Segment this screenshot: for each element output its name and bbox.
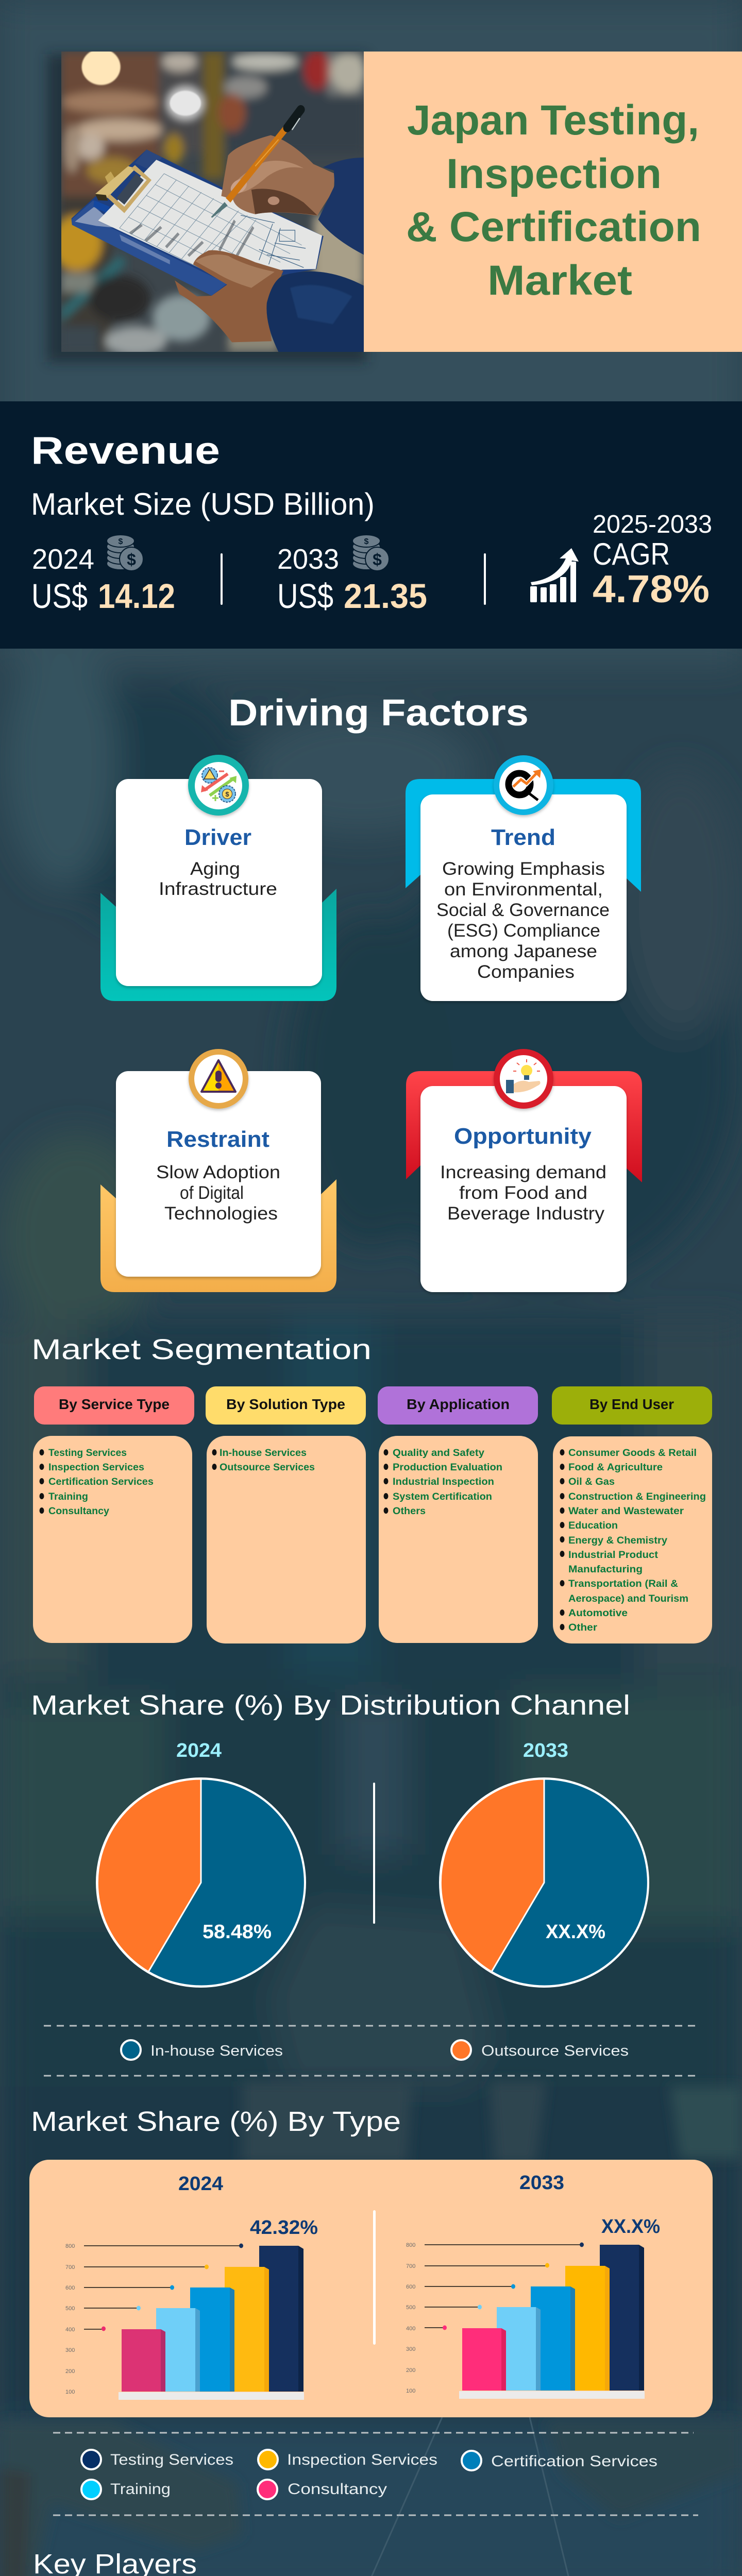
column: by end user: Education xyxy=(568,1520,618,1531)
stat: 2024 revenue: 2024 xyxy=(32,543,94,575)
icon: growth bars and arrow xyxy=(530,548,579,602)
column: by service type: Consultancy xyxy=(48,1506,109,1517)
stat: 2033 revenue: US$ xyxy=(277,577,333,616)
heading: driving factors: Driving Factors xyxy=(228,692,529,734)
text: restraint description: Technologies xyxy=(164,1204,278,1224)
column: by solution type: In-house Services xyxy=(220,1448,307,1459)
bar chart: 2024: 2024 xyxy=(178,2173,223,2195)
column: by service type: Certification Services xyxy=(48,1477,154,1487)
text: driver description: Infrastructure xyxy=(159,879,277,899)
column: by end user: Consumer Goods & Retail xyxy=(568,1448,697,1459)
form paper and table xyxy=(98,160,322,281)
holding hand xyxy=(175,250,283,342)
bar chart: 2033: 100 xyxy=(406,2388,415,2394)
column: by application: Quality and Safety xyxy=(393,1448,484,1459)
column: by end user: Oil & Gas xyxy=(568,1477,615,1487)
legend: type: Certification Services xyxy=(491,2453,657,2470)
text: trend description: on Environmental, xyxy=(444,879,603,900)
title: & Certification xyxy=(406,204,701,250)
bar chart: 2033: 2033 xyxy=(519,2172,564,2194)
title: Inspection xyxy=(446,150,662,197)
bar chart: 2033: 400 xyxy=(406,2326,415,2332)
divider xyxy=(484,553,486,605)
legend: type: Consultancy xyxy=(288,2481,387,2498)
pie chart: 2033: 2033 xyxy=(523,1740,568,1761)
panel: trend card xyxy=(406,755,641,1001)
panel: restraint card xyxy=(100,1049,336,1292)
bar chart: 2024: 200 xyxy=(65,2368,75,2375)
text: trend description: Social & Governance xyxy=(436,900,610,920)
icon: restraint badge xyxy=(189,1049,248,1109)
text: restraint description xyxy=(156,1162,280,1224)
stat: CAGR: CAGR xyxy=(593,537,670,571)
pie chart: 2024: 2024 xyxy=(176,1740,222,1761)
title: Market xyxy=(487,257,632,304)
bar chart: 2033: 300 xyxy=(406,2346,415,2352)
text: trend description: among Japanese xyxy=(450,941,597,961)
column: by service type: Training xyxy=(48,1492,88,1502)
bar chart: 2033: XX.X% xyxy=(601,2216,660,2238)
stat: CAGR: 2025-2033 xyxy=(593,511,712,538)
bar chart: 2033: 200 xyxy=(406,2367,415,2374)
bar chart: 2033: 600 xyxy=(406,2284,415,2290)
text: driver description: Aging xyxy=(190,859,240,879)
divider xyxy=(373,2210,376,2345)
column: by application: System Certification xyxy=(393,1492,492,1502)
column: by end user: Industrial Product xyxy=(568,1550,659,1561)
divider xyxy=(221,553,223,605)
clipboard board xyxy=(72,149,324,296)
pen xyxy=(211,110,301,218)
text: trend description: Companies xyxy=(477,962,575,982)
pie chart: 2024: 58.48% xyxy=(203,1921,272,1943)
stat: 2033 revenue: 2033 xyxy=(277,543,339,575)
heading: market share by type: Market Share (%) By Type xyxy=(31,2106,401,2137)
bar chart: 2024: 700 xyxy=(65,2264,75,2270)
bar chart: 2024 xyxy=(65,2173,318,2400)
heading: market share by distribution channel: Market Share (%) By Distribution Channel xyxy=(31,1690,630,1721)
column: by application xyxy=(378,1386,538,1643)
bar chart: 2024: 600 xyxy=(65,2285,75,2291)
bar chart: 2033: 500 xyxy=(406,2304,415,2311)
column: by application: Others xyxy=(393,1506,426,1517)
icon: driver badge: $ xyxy=(225,790,229,798)
icon: coins 2024: $ xyxy=(119,537,123,546)
text: opportunity description: Increasing demand xyxy=(440,1162,606,1182)
title xyxy=(406,97,701,304)
legend: type: Testing Services xyxy=(110,2451,233,2468)
text: restraint description: Slow Adoption xyxy=(156,1162,280,1182)
bar chart: 2024: 800 xyxy=(65,2243,75,2249)
text: restraint description: of Digital xyxy=(180,1183,244,1203)
hero shadow xyxy=(47,54,367,362)
legend: type: Inspection Services xyxy=(287,2451,437,2468)
column: by end user: Food & Agriculture xyxy=(568,1462,663,1473)
icon: coins 2024: $ xyxy=(127,550,136,569)
bar chart: 2033: 700 xyxy=(406,2263,415,2269)
legend: distribution channel xyxy=(121,2040,629,2060)
legend: distribution channel: Outsource Services xyxy=(481,2043,629,2059)
metal clip xyxy=(95,165,151,213)
column: by end user: Transportation (Rail & xyxy=(568,1579,678,1589)
icon: coins 2033: $ xyxy=(364,537,369,546)
text: opportunity description: from Food and xyxy=(459,1183,587,1203)
icon: trend badge xyxy=(494,755,553,815)
panel: type charts xyxy=(29,2160,713,2417)
column: by end user: By End User xyxy=(589,1396,674,1412)
bar chart: 2024: 42.32% xyxy=(250,2217,318,2239)
pie chart: 2033 xyxy=(439,1740,649,1988)
text: driver description xyxy=(159,859,277,899)
column: by service type: By Service Type xyxy=(59,1396,170,1412)
legend: type xyxy=(81,2450,657,2499)
panel: driver card xyxy=(100,755,336,1001)
heading: driver: Driver xyxy=(184,825,251,850)
stat: 2024 revenue: 14.12 xyxy=(98,577,175,616)
title: Japan Testing, xyxy=(407,97,699,144)
heading: opportunity: Opportunity xyxy=(454,1124,592,1149)
legend: type: Training xyxy=(110,2481,171,2498)
column: by application: Industrial Inspection xyxy=(393,1477,494,1487)
column: by end user: Energy & Chemistry xyxy=(568,1535,667,1546)
stat: 2024 revenue: US$ xyxy=(31,577,88,616)
column: by solution type: By Solution Type xyxy=(226,1396,345,1412)
column: by service type: Testing Services xyxy=(48,1448,127,1459)
lower sleeve xyxy=(266,272,364,352)
column: by solution type xyxy=(206,1386,366,1643)
icon: coins 2033: $ xyxy=(373,550,382,569)
column: by service type xyxy=(33,1386,194,1643)
icon: coins 2024 xyxy=(107,535,143,571)
column: by end user: Aerospace) and Tourism xyxy=(568,1594,688,1604)
column: by end user: Water and Wastewater xyxy=(568,1506,684,1517)
stat: 2024 revenue xyxy=(31,543,175,616)
column: by end user: Other xyxy=(568,1622,598,1633)
text: trend description xyxy=(436,859,610,982)
column: by end user: Construction & Engineering xyxy=(568,1492,706,1502)
divider xyxy=(373,1783,375,1924)
heading: market segmentation: Market Segmentation xyxy=(31,1333,372,1365)
column: by application: Production Evaluation xyxy=(393,1462,502,1473)
column: by end user xyxy=(552,1386,712,1643)
column: by end user: Automotive xyxy=(568,1608,628,1619)
icon: coins 2033 xyxy=(352,535,389,571)
upper sleeve xyxy=(318,158,364,255)
stat: CAGR: 4.78% xyxy=(593,567,710,611)
hero photo: hands filling in an inspection form on a clipboard xyxy=(61,52,364,352)
text: trend description: (ESG) Compliance xyxy=(447,921,600,941)
column: by solution type: Outsource Services xyxy=(220,1462,315,1473)
text: opportunity description: Beverage Industry xyxy=(447,1204,605,1224)
writing hand xyxy=(221,135,335,216)
heading: restraint: Restraint xyxy=(166,1127,269,1152)
text: market size: Market Size (USD Billion) xyxy=(31,487,375,521)
heading: trend: Trend xyxy=(491,825,555,850)
bar chart: 2033 xyxy=(406,2172,660,2399)
column: by service type: Inspection Services xyxy=(48,1462,144,1473)
text: opportunity description xyxy=(440,1162,606,1224)
legend: distribution channel: In-house Services xyxy=(150,2043,283,2059)
stat: 2033 revenue: 21.35 xyxy=(344,577,427,616)
panel: revenue band xyxy=(0,401,742,649)
column: by application: By Application xyxy=(407,1396,510,1412)
panel: opportunity card xyxy=(406,1049,642,1292)
bar chart: 2024: 400 xyxy=(65,2327,75,2333)
pie chart: 2033: XX.X% xyxy=(546,1921,605,1943)
title panel xyxy=(364,52,742,352)
pie chart: 2024 xyxy=(96,1740,306,1988)
column: by end user: Manufacturing xyxy=(568,1564,643,1575)
stat: CAGR xyxy=(593,511,712,611)
bar chart: 2024: 100 xyxy=(65,2389,75,2395)
text: trend description: Growing Emphasis xyxy=(442,859,605,879)
bar chart: 2024: 300 xyxy=(65,2347,75,2353)
bar chart: 2033: 800 xyxy=(406,2242,415,2248)
heading: revenue: Revenue xyxy=(31,429,220,472)
stat: 2033 revenue xyxy=(277,543,427,616)
bar chart: 2024: 500 xyxy=(65,2306,75,2312)
icon: opportunity badge xyxy=(494,1049,553,1109)
icon: driver badge xyxy=(188,755,249,816)
